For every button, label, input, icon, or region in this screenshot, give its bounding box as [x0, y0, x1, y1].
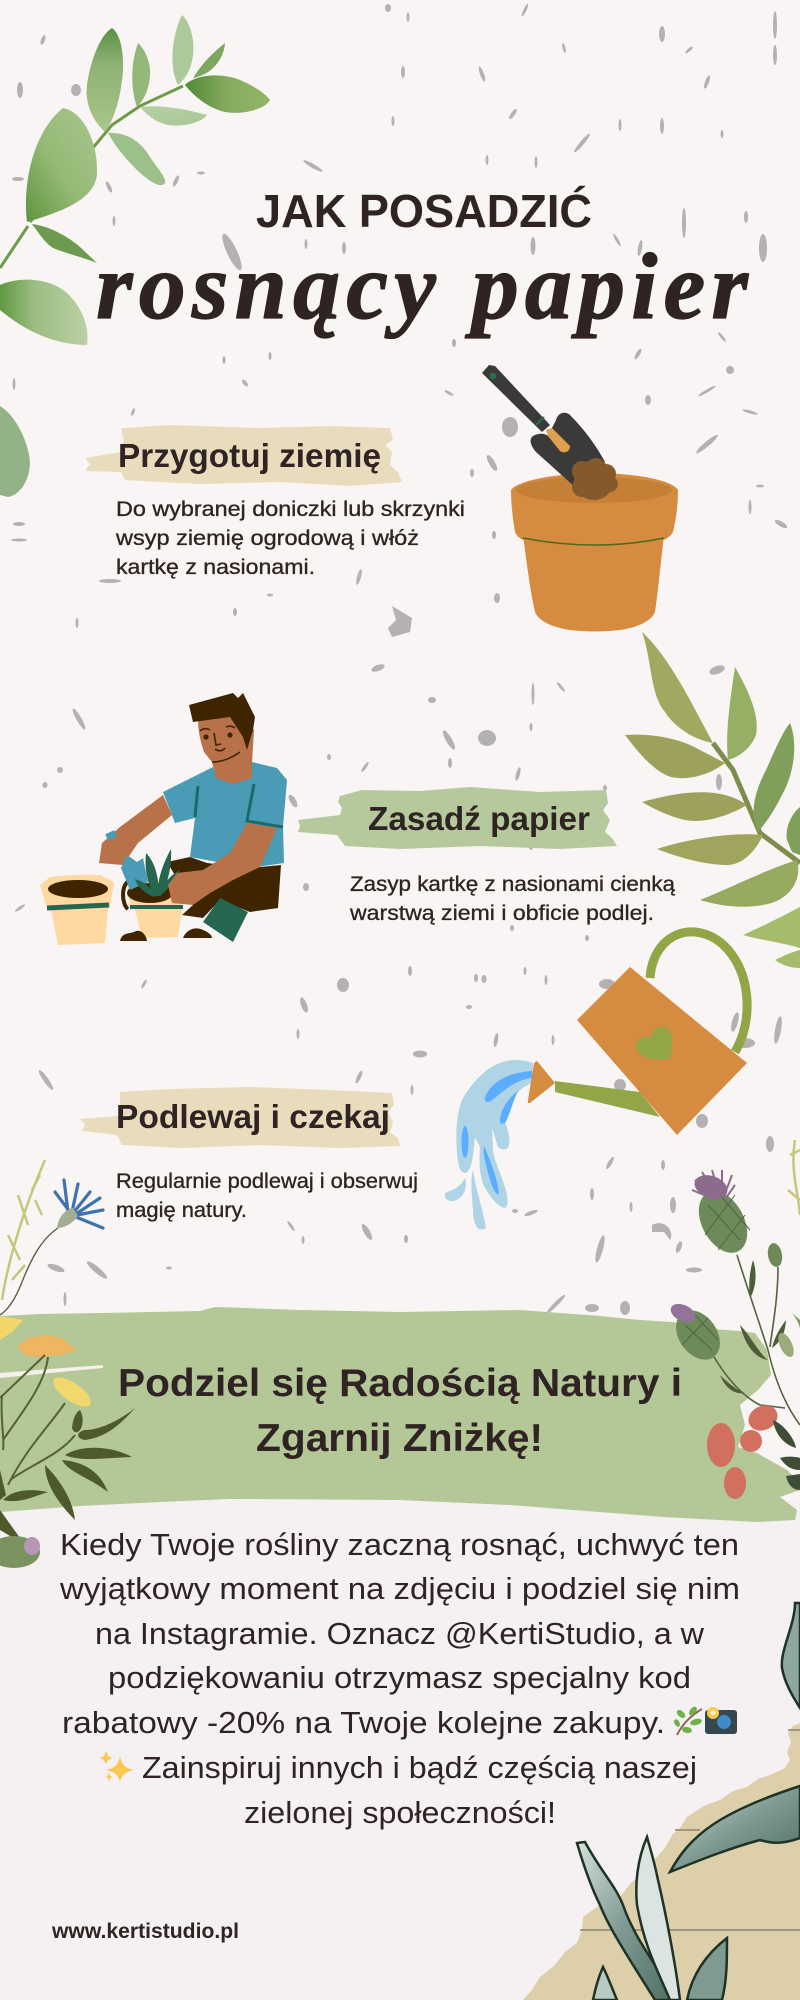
heading: Podlewaj i czekaj [116, 1098, 390, 1135]
pot right [127, 878, 182, 938]
shirt [163, 762, 287, 868]
left edge leaf [0, 406, 30, 497]
left arm [99, 795, 172, 865]
step 2 text: warstwą ziemi i obficie podlej. [349, 901, 654, 925]
thistle two [667, 1302, 729, 1368]
body paragraph: rabatowy -20% na Twoje kolejne zakupy. [62, 1705, 665, 1740]
thistle one [689, 1183, 757, 1261]
paper seed speckles [11, 3, 788, 1315]
website url: www.kertistudio.pl [51, 1920, 239, 1943]
water stream [456, 1060, 533, 1208]
small upper leaf [132, 43, 150, 107]
heart [636, 1027, 672, 1060]
heading: Przygotuj ziemię [118, 437, 381, 474]
hair [189, 693, 255, 750]
flower stems [0, 1355, 75, 1485]
step 3 brush and heading [80, 1087, 400, 1148]
heading: Zasadź papier [368, 800, 590, 837]
side bud [775, 1331, 797, 1359]
body paragraph: wyjątkowy moment na zdjęciu i podziel się nim [59, 1571, 740, 1606]
lower narrow leaf [32, 224, 97, 263]
cornflower [55, 1180, 103, 1228]
trowel handle [482, 365, 550, 432]
soil clump [572, 458, 618, 500]
icon: trowel in flower pot [482, 365, 678, 632]
right leaf [185, 75, 270, 113]
icon: watering can with water [445, 932, 747, 1229]
body paragraph: na Instagramie. Oznacz @KertiStudio, a w [95, 1616, 705, 1651]
leaf branch top left [0, 15, 270, 345]
step 1 text [115, 497, 465, 579]
large leaf [26, 108, 97, 222]
watercolor leaves bottom right [577, 1603, 800, 2000]
torn beige paper bottom right [523, 1723, 800, 2000]
shorts [167, 857, 281, 918]
pot rim [511, 473, 678, 540]
step 1 text: kartkę z nasionami. [116, 555, 315, 579]
banner heading: Podziel się Radością Natury i [118, 1362, 682, 1405]
body paragraph: podziękowaniu otrzymasz specjalny kod [108, 1660, 691, 1695]
wildflowers left [0, 1160, 135, 1568]
bud [766, 1242, 784, 1268]
banner heading [118, 1362, 682, 1460]
can body [577, 967, 747, 1135]
bottom large leaf [0, 280, 88, 345]
step 3 text: magię natury. [116, 1198, 247, 1222]
can nozzle [528, 1061, 555, 1103]
icon: sparkles emoji [100, 1751, 134, 1782]
banner heading: Zgarnij Zniżkę! [256, 1417, 543, 1460]
body paragraph: Zainspiruj innych i bądź częścią naszej [142, 1750, 697, 1785]
title line one: JAK POSADZIĆ [256, 185, 592, 237]
top pale leaf [172, 15, 193, 85]
right arm [168, 823, 277, 905]
step 1 brush and heading [85, 425, 402, 486]
yellow flower [49, 1372, 95, 1412]
pot inside [516, 477, 672, 503]
tall leaf [87, 28, 123, 132]
water highlights [485, 1071, 532, 1102]
can spout [555, 1081, 660, 1117]
pot body [523, 535, 664, 632]
step 2 brush and heading [298, 787, 617, 849]
small dark leaves [720, 1260, 786, 1393]
body paragraph [59, 1527, 740, 1830]
body paragraph: Kiedy Twoje rośliny zaczną rosnąć, uchwyć ten [60, 1527, 739, 1562]
trowel blade [531, 413, 605, 488]
icon: camera with flash emoji [705, 1707, 737, 1734]
step 1 text: Do wybranej doniczki lub skrzynki [116, 497, 465, 521]
title [96, 185, 749, 339]
wildflowers right [667, 1140, 800, 1499]
orange flower [17, 1335, 77, 1357]
dark foliage [773, 1420, 800, 1490]
mid leaf [108, 133, 165, 185]
soil mounds [120, 931, 147, 941]
face [198, 715, 254, 784]
pot left [40, 875, 114, 945]
narrow leaf [193, 43, 225, 78]
title line two: rosnący papier [96, 235, 749, 339]
illustration: gardener planting [40, 693, 287, 945]
step 2 text [349, 872, 675, 925]
can handle [650, 932, 747, 1052]
blue trowel [121, 855, 148, 890]
grass stem [2, 1160, 45, 1300]
step 3 text [116, 1169, 418, 1222]
step 3 text: Regularnie podlewaj i obserwuj [116, 1169, 418, 1193]
step 1 text: wsyp ziemię ogrodową i włóż [115, 526, 419, 550]
stems [714, 1255, 800, 1425]
sock [203, 898, 248, 942]
body paragraph: zielonej społeczności! [244, 1795, 556, 1830]
plant leaves [135, 849, 180, 897]
dark leaves [0, 1408, 135, 1545]
icon: herb emoji [673, 1705, 703, 1735]
facial features [203, 732, 233, 740]
coral flowers [707, 1423, 735, 1467]
grass right [788, 1140, 800, 1215]
pale lower leaf [140, 106, 207, 126]
step 2 text: Zasyp kartkę z nasionami cienką [350, 872, 675, 896]
green banner [0, 1307, 800, 1522]
cornflower stem [0, 1228, 58, 1315]
yellow flower top [0, 1316, 23, 1340]
fern branch right [625, 632, 800, 968]
bottom thistle [0, 1536, 40, 1568]
